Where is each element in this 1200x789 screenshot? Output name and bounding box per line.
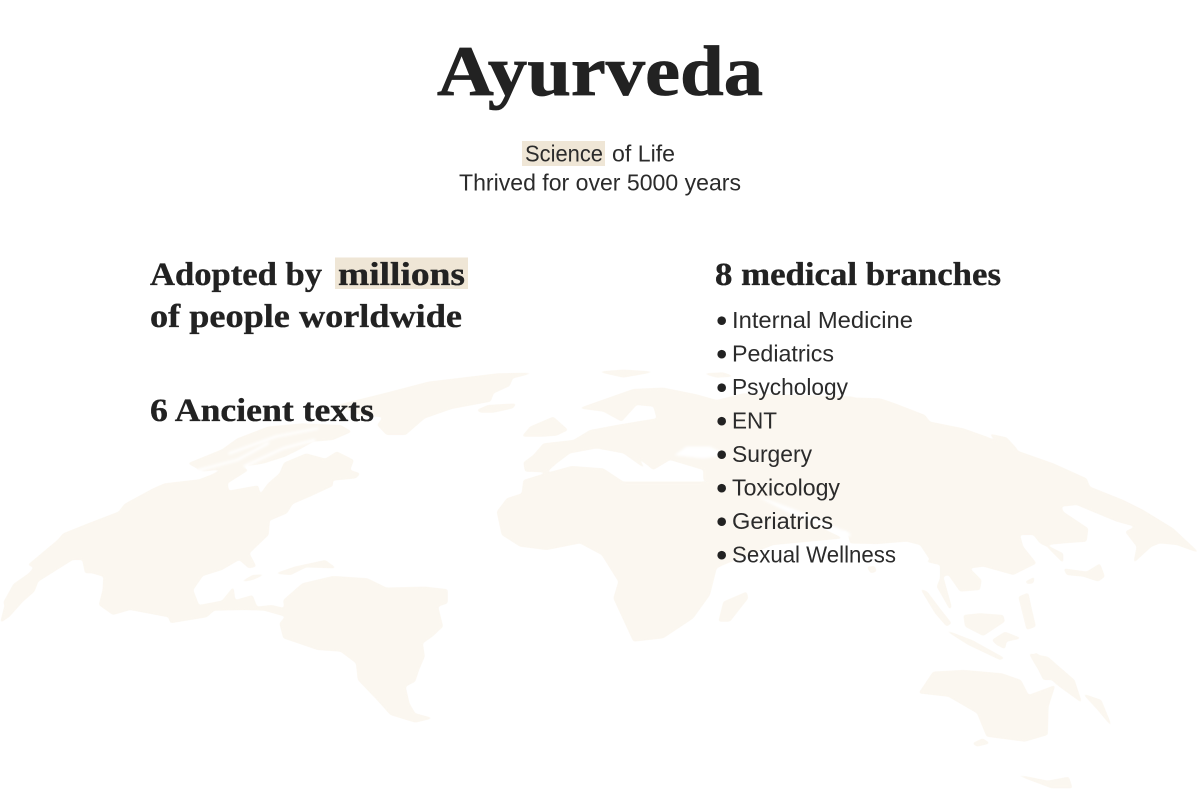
novaya zemlya strips: [597, 370, 657, 378]
sri lanka: [867, 566, 877, 573]
africa: [497, 466, 843, 642]
list: medical branches: Pediatrics: [732, 340, 834, 366]
list: medical branches: Sexual Wellness: [732, 542, 896, 568]
taiwan: [1025, 577, 1035, 584]
list: medical branches: ENT: [732, 408, 777, 434]
list: medical branches: Internal Medicine: [732, 307, 913, 333]
new zealand: [1082, 693, 1113, 728]
arctic channels: [199, 428, 318, 470]
list: medical branches: Psychology: [732, 374, 848, 400]
heading: adopted by millions: of people worldwide: [150, 299, 462, 335]
list: medical branches: Surgery: [732, 441, 812, 467]
heading: adopted by millions: millions: [338, 257, 465, 293]
heading: adopted by millions: [150, 257, 468, 335]
greenland: [337, 373, 536, 435]
borneo: [963, 613, 1005, 636]
highlight: science: [522, 141, 605, 166]
britain: [522, 417, 568, 437]
sulawesi: [992, 632, 1022, 649]
antarctic fragment: [1011, 773, 1073, 788]
subtitle line 2: Thrived for over 5000 years: [459, 170, 741, 196]
map: oceania: [918, 653, 1113, 788]
background world map: [0, 370, 1200, 788]
new guinea: [1035, 652, 1072, 680]
list: medical branches: Toxicology: [732, 474, 840, 500]
north america: [0, 451, 361, 623]
tasmania: [972, 738, 990, 747]
australia: [918, 670, 1055, 742]
inland waters: [199, 428, 850, 537]
japan: [1063, 563, 1105, 582]
subtitle line 1: Science: [525, 140, 603, 166]
new guinea east: [1029, 653, 1082, 703]
heading: 8 medical branches: 8 medical branches: [715, 257, 1001, 293]
east asia: [837, 397, 1200, 610]
sumatra: [920, 588, 952, 627]
subtitle: [459, 140, 741, 196]
map: americas: [0, 373, 536, 723]
madagascar: [718, 592, 748, 622]
list: medical branches: [717, 307, 913, 568]
highlight: millions: [335, 258, 468, 289]
red sea: [755, 495, 850, 537]
philippines: [1018, 593, 1036, 630]
south america: [279, 576, 448, 723]
heading: adopted by millions: Adopted by: [150, 257, 323, 293]
map: east asia and oceania: [837, 397, 1200, 680]
map: europe, africa, west asia: [497, 370, 853, 642]
title: Ayurveda: [437, 33, 763, 111]
caribbean islands: [239, 560, 337, 583]
java: [942, 628, 1005, 660]
europe and west asia: [523, 388, 853, 532]
iceland: [476, 403, 517, 413]
arctic islands: [188, 423, 352, 472]
heading: 6 ancient texts: 6 Ancient texts: [150, 393, 374, 429]
list: medical branches: Geriatrics: [732, 508, 833, 534]
subtitle line 1: of Life: [612, 140, 675, 166]
sakhalin: [988, 433, 1018, 450]
black sea: [675, 447, 727, 458]
